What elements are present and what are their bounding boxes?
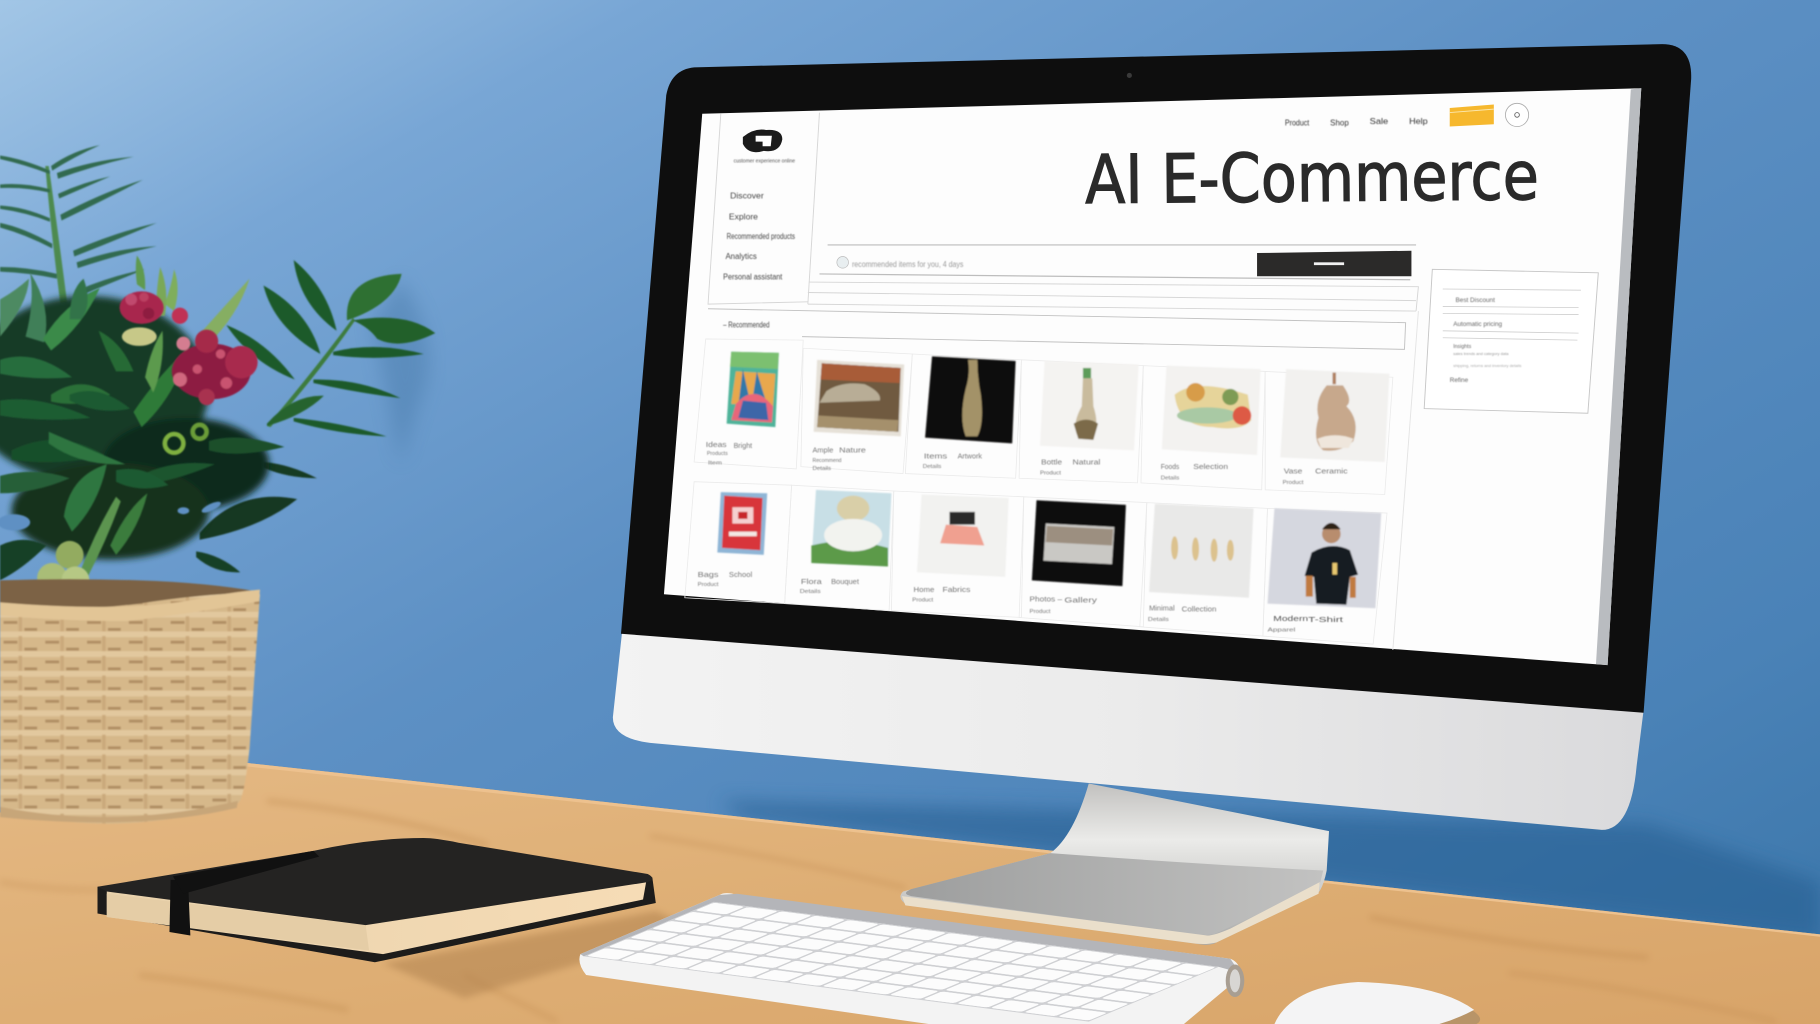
palm fronds	[0, 145, 157, 304]
right end roll	[1226, 965, 1244, 997]
product captions: School	[729, 570, 752, 579]
product captions: Details	[800, 589, 821, 595]
filter panel: Refine	[1450, 377, 1469, 384]
plant	[0, 145, 435, 608]
silver top edge	[580, 894, 1240, 973]
product captions: Product	[1040, 471, 1062, 477]
pages	[107, 880, 647, 954]
sidebar menu: Explore	[729, 212, 758, 221]
yellow button	[1450, 104, 1494, 127]
top navigation: Shop	[1330, 117, 1349, 127]
product captions: Bouquet	[831, 577, 860, 586]
product 7: red backpack	[717, 492, 767, 555]
product captions: Details	[1161, 475, 1180, 481]
product captions: Gallery	[1064, 595, 1097, 604]
elastic strap	[169, 880, 190, 936]
product captions: Collection	[1182, 605, 1216, 614]
key field	[584, 902, 1219, 1022]
product captions: Bags	[698, 570, 719, 579]
sidebar menu: Personal assistant	[723, 273, 783, 282]
black bezel	[621, 44, 1691, 713]
product captions: Product	[698, 582, 719, 588]
black cover	[98, 838, 652, 925]
product captions: Selection	[1193, 462, 1228, 471]
top navigation	[1285, 103, 1529, 127]
product 4: glass bottle	[1040, 361, 1139, 450]
product captions: Bright	[734, 441, 753, 450]
product captions: Product	[1283, 480, 1304, 486]
wall gaps in foliage	[0, 500, 222, 530]
product captions: Vase	[1284, 467, 1302, 476]
website layout lines	[708, 113, 1418, 650]
filter panel: shipping, returns and inventory details	[1453, 363, 1521, 368]
product captions: T-Shirt	[1308, 615, 1344, 624]
product 5: food bowl	[1162, 366, 1261, 455]
top navigation: Help	[1409, 116, 1428, 126]
logo	[734, 130, 795, 165]
filter panel: Best Discount	[1456, 297, 1495, 304]
green buds	[165, 425, 207, 453]
back cover	[98, 878, 656, 962]
product captions	[698, 440, 1348, 633]
product captions: Details	[923, 464, 942, 470]
notebook	[98, 838, 656, 962]
product captions: Details	[813, 466, 832, 472]
silver chin	[613, 631, 1644, 830]
product grid	[685, 339, 1393, 644]
section heading: – Recommended	[723, 320, 770, 329]
camera	[1127, 73, 1132, 78]
product captions: Minimal	[1149, 604, 1175, 613]
product 6: ceramic vase	[1280, 369, 1389, 462]
product captions: Nature	[839, 446, 866, 455]
right branch	[196, 260, 435, 572]
product captions: Recommend	[813, 458, 842, 464]
product 3: figure on black	[925, 356, 1016, 443]
card frames	[685, 339, 1393, 644]
keyboard	[579, 893, 1244, 1024]
product captions: Details	[1148, 617, 1169, 623]
product 8: white bouquet	[811, 490, 891, 566]
pale green blossom	[28, 541, 109, 608]
title: AI E-Commerce	[1085, 137, 1539, 219]
white body	[579, 893, 1240, 1024]
top navigation: Sale	[1370, 116, 1388, 126]
product captions: Foods	[1161, 462, 1179, 471]
stand	[900, 783, 1329, 945]
filter panel	[1424, 269, 1598, 413]
filter panel: Insights	[1453, 344, 1472, 350]
product 10: photo on black	[1032, 500, 1126, 586]
wooden desk	[0, 763, 1820, 1024]
product captions: Ceramic	[1315, 467, 1348, 476]
desk shadows under objects	[383, 911, 696, 998]
sidebar menu	[723, 191, 795, 282]
product captions: Natural	[1072, 457, 1101, 466]
filter panel: sales trends and category data	[1453, 351, 1509, 356]
account icon	[1505, 103, 1529, 127]
product captions: Photos –	[1030, 594, 1063, 603]
sidebar menu: Discover	[730, 191, 764, 200]
monitor	[613, 44, 1691, 945]
product captions: Item	[708, 460, 722, 466]
product captions: Bottle	[1041, 457, 1062, 466]
product captions: Products	[707, 451, 728, 457]
product 2: brown crate	[814, 360, 904, 436]
logo: customer experience online	[734, 159, 795, 165]
product captions: Product	[1030, 609, 1051, 615]
product captions: Modern	[1273, 614, 1308, 623]
dense foliage	[0, 296, 269, 559]
product captions: Fabrics	[943, 585, 971, 594]
product captions: Flora	[801, 577, 823, 586]
screen	[664, 88, 1641, 665]
product captions: Home	[913, 585, 934, 594]
product captions: Ample	[813, 446, 833, 455]
wicker basket	[0, 579, 260, 824]
product 11: pale hangers	[1149, 504, 1254, 598]
top navigation: Product	[1285, 117, 1310, 127]
filter panel: Automatic pricing	[1453, 321, 1503, 328]
sidebar menu: Analytics	[725, 252, 757, 261]
search bar	[837, 251, 1411, 276]
product captions: Items	[924, 451, 947, 460]
product captions: Artwork	[958, 451, 982, 460]
product 1: colorful artwork	[727, 352, 779, 427]
product captions: Ideas	[706, 440, 727, 449]
product 9: pink items	[917, 494, 1009, 577]
leaf detail	[0, 255, 284, 580]
search bar: recommended items for you, 4 days	[852, 260, 963, 269]
mouse	[1274, 982, 1480, 1024]
product captions: Product	[912, 597, 934, 603]
sidebar menu: Recommended products	[727, 232, 795, 241]
product captions: Apparel	[1268, 627, 1295, 633]
product 12: man in black t-shirt	[1268, 508, 1381, 608]
pink flowers	[120, 291, 258, 405]
